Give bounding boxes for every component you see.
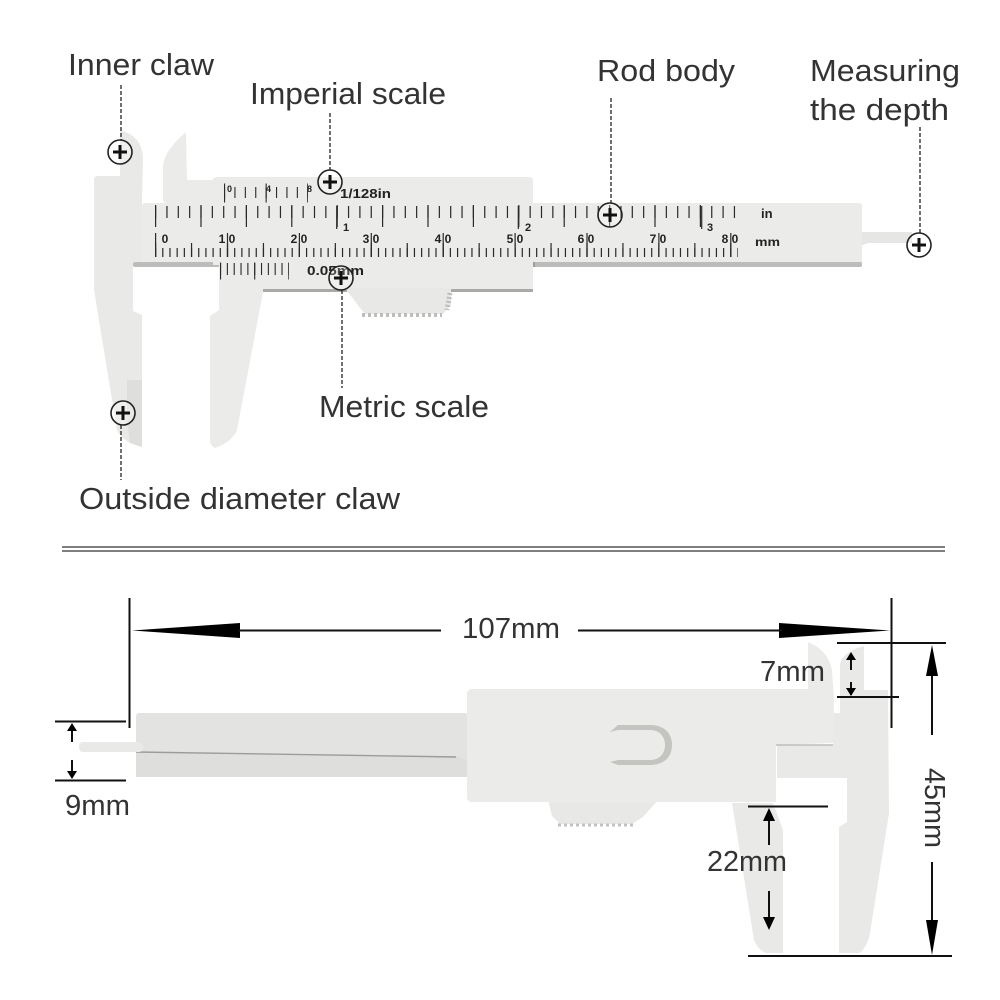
thumbwheel back view	[548, 800, 658, 825]
scale numbers: in	[761, 206, 773, 221]
scale numbers: 8 0	[722, 232, 739, 246]
dimension: 7mm	[760, 643, 946, 697]
callout: rod body	[597, 53, 736, 227]
scale numbers: 0	[162, 232, 169, 246]
dimension: 107mm	[130, 598, 892, 728]
scale numbers: 8	[307, 184, 312, 194]
beam back view	[79, 713, 468, 777]
inch scale ticks	[155, 206, 737, 229]
callout: rod body: Rod body	[597, 53, 736, 88]
divider	[62, 547, 945, 551]
dimension: 9mm: 9mm	[65, 790, 130, 822]
scale numbers: 2	[525, 222, 531, 234]
scale numbers: mm	[755, 235, 780, 249]
fixed jaw back view	[777, 646, 889, 953]
callout: measuring the depth: Measuring	[810, 53, 960, 88]
slider back view	[467, 642, 834, 802]
scale numbers	[162, 184, 780, 278]
scale numbers: 1/128in	[340, 186, 391, 201]
scale numbers: 3 0	[363, 232, 380, 246]
dimension: 7mm: 7mm	[760, 656, 825, 688]
callout: inner claw	[68, 47, 215, 164]
dimension: 22mm	[707, 806, 828, 930]
bottom caliper illustration	[79, 642, 889, 953]
slot	[610, 725, 672, 765]
scale numbers: 4	[266, 184, 271, 194]
moving jaw and slider	[163, 132, 533, 448]
callout: outside diameter claw: Outside diameter claw	[79, 481, 401, 516]
vernier ticks	[220, 192, 308, 271]
scale numbers: 4 0	[435, 232, 452, 246]
callout: metric scale: Metric scale	[319, 389, 489, 424]
callout: inner claw: Inner claw	[68, 47, 215, 82]
scale numbers: 6 0	[578, 232, 595, 246]
scale numbers: 0.05mm	[307, 263, 364, 278]
scale numbers: 1 0	[219, 232, 236, 246]
dimension: 107mm: 107mm	[462, 613, 560, 645]
dimension: 9mm	[55, 722, 130, 822]
metric scale ticks	[155, 245, 738, 252]
top caliper illustration	[94, 130, 912, 448]
scale numbers: 0	[227, 184, 232, 194]
thumbwheel	[345, 288, 451, 315]
scale numbers: 3	[707, 222, 713, 234]
dimension: 45mm: 45mm	[918, 768, 950, 848]
beam	[133, 203, 862, 267]
scale numbers: 2 0	[291, 232, 308, 246]
callout: measuring the depth	[810, 53, 960, 257]
callout: metric scale	[319, 266, 489, 424]
fixed jaw	[94, 130, 143, 447]
scale numbers: 1	[343, 222, 349, 234]
moving jaw back view	[732, 803, 783, 953]
callout: imperial scale: Imperial scale	[250, 76, 446, 111]
scale numbers: 5 0	[507, 232, 524, 246]
depth rod	[860, 232, 912, 246]
scale numbers: 7 0	[650, 232, 667, 246]
dimension: 45mm	[748, 645, 952, 956]
callout: outside diameter claw	[79, 401, 401, 516]
callout: measuring the depth: the depth	[810, 92, 949, 127]
callout: imperial scale	[250, 76, 446, 194]
dimension: 22mm: 22mm	[707, 846, 787, 878]
